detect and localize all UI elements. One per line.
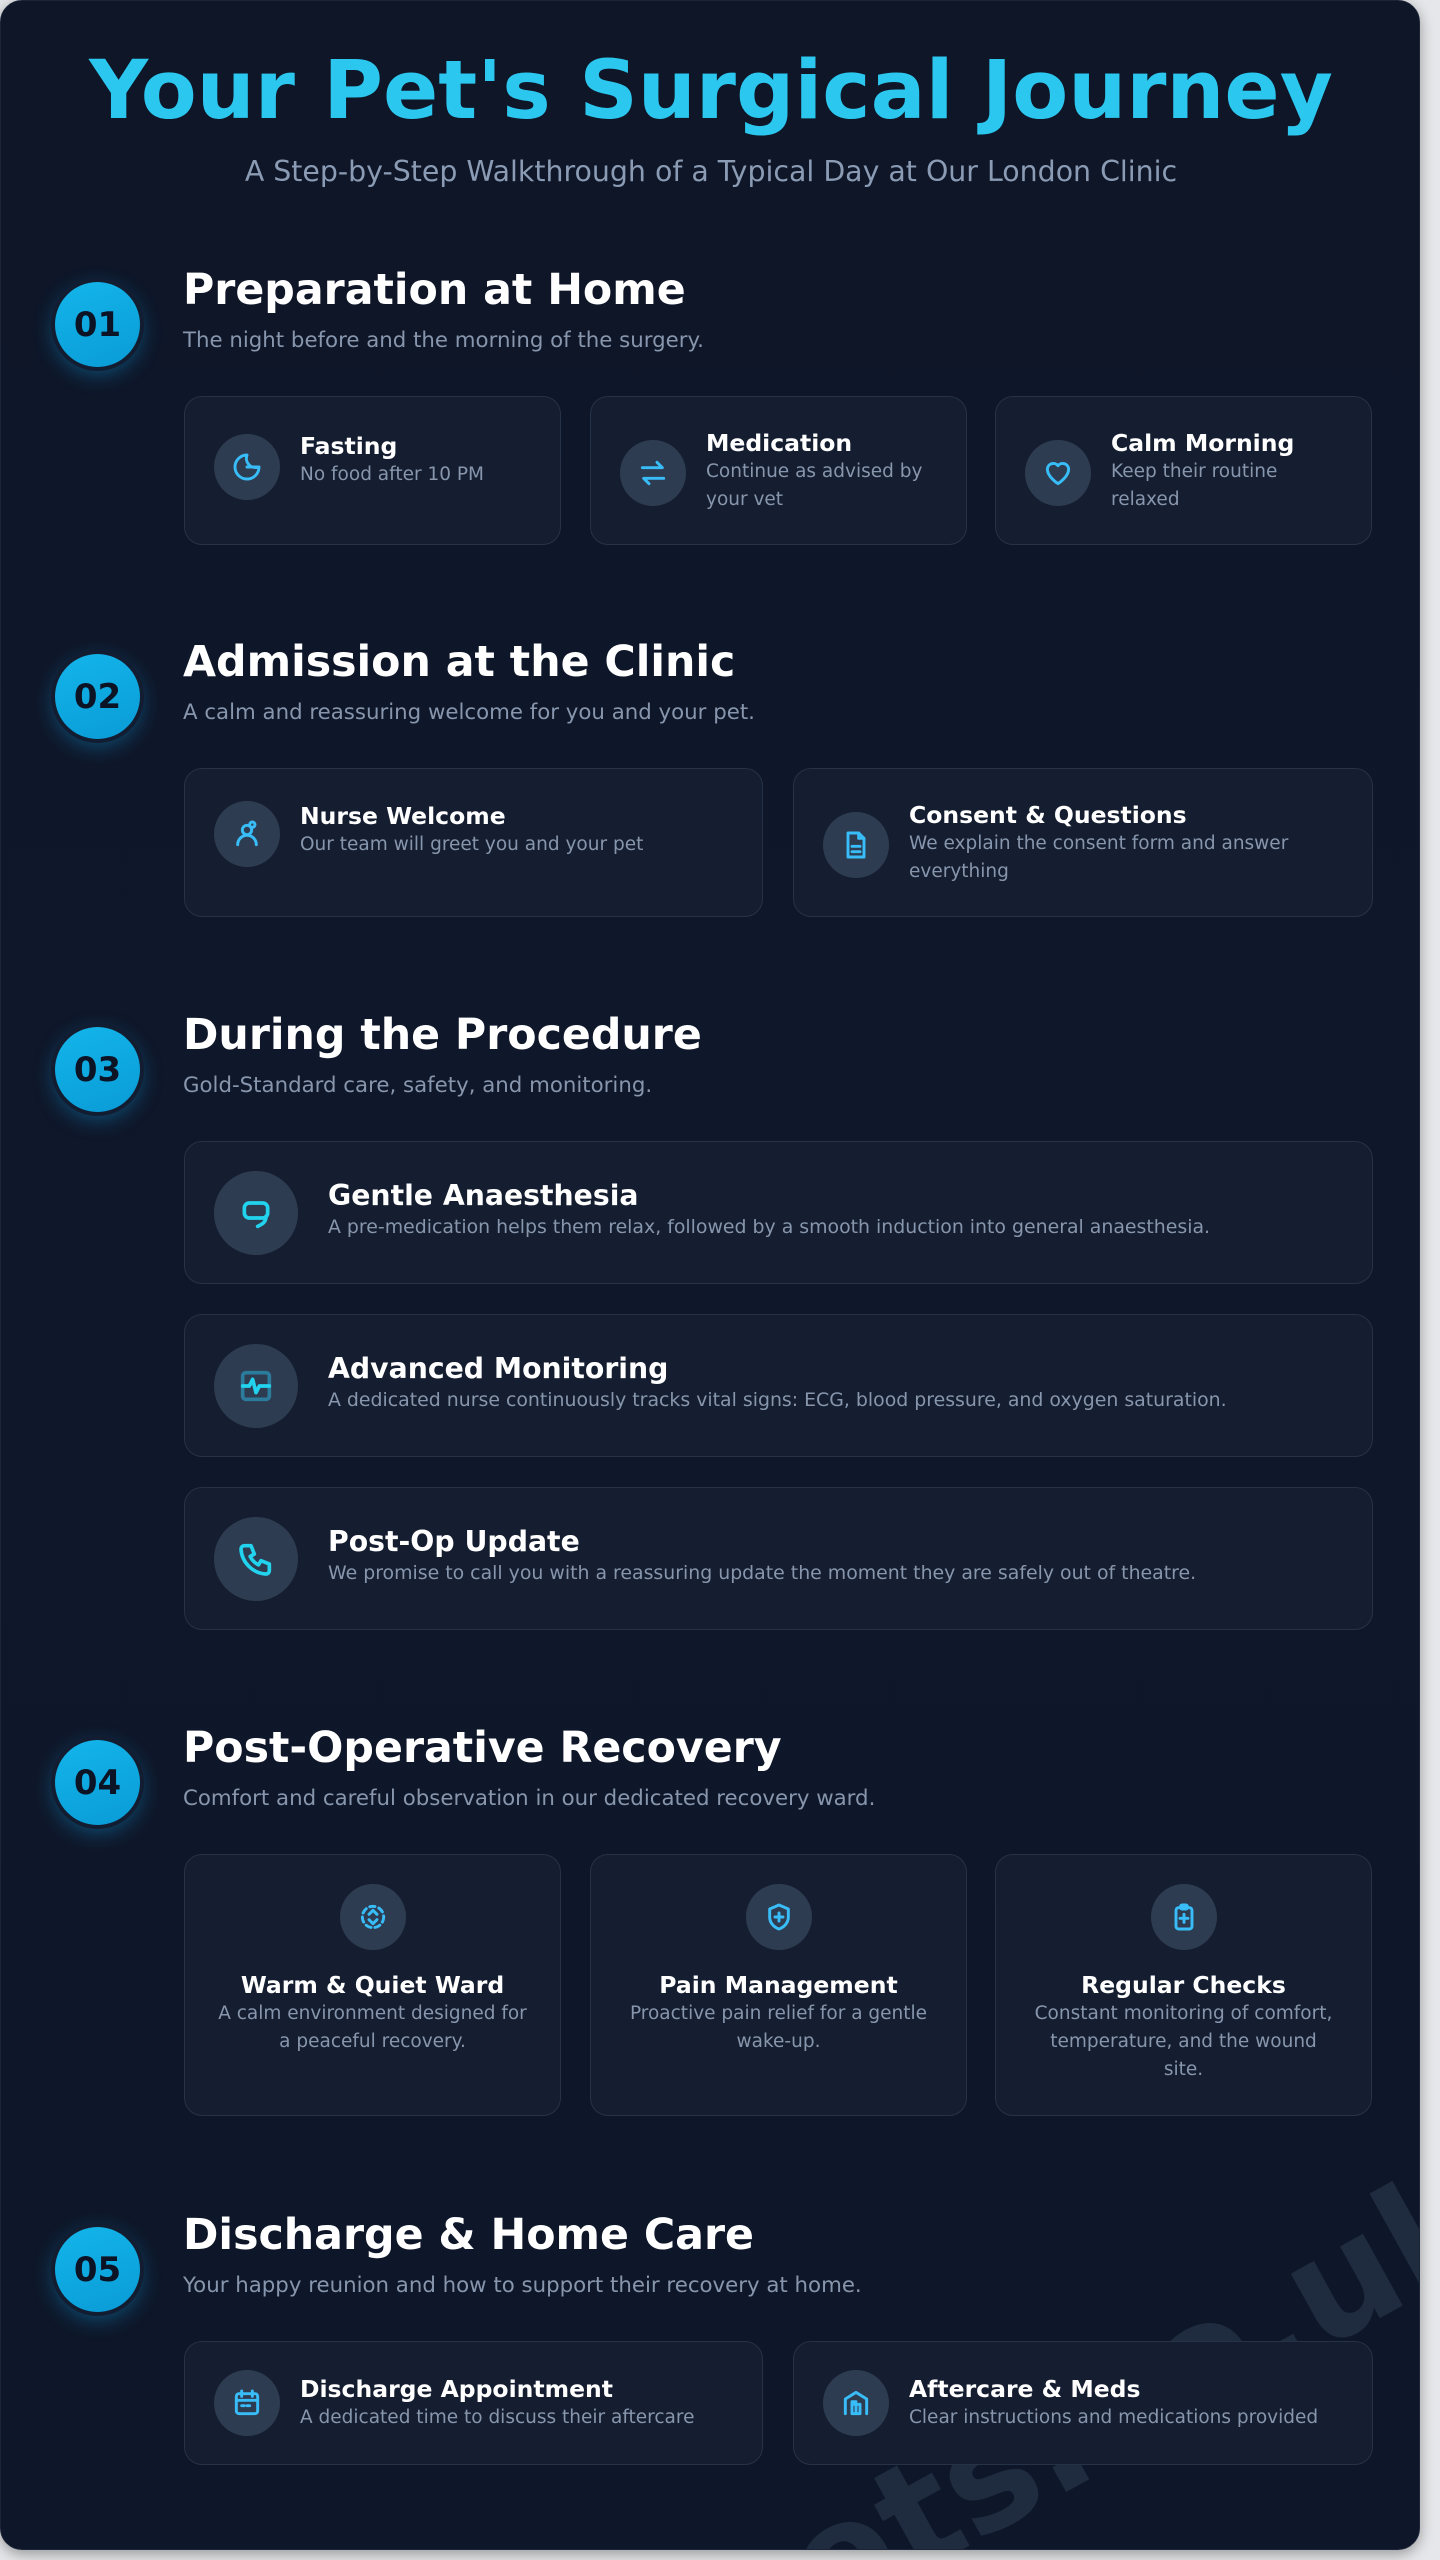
step number 02 (55, 654, 140, 739)
heading: Discharge & Home Care (183, 2210, 754, 2260)
card: aftercare: Clear instructions and medications provided (909, 2407, 1318, 2428)
card: consent: We explain the consent form and answer everything (909, 832, 1288, 882)
card: discharge appointment: A dedicated time to discuss their aftercare (300, 2407, 694, 2428)
card: aftercare (793, 2341, 1373, 2465)
section 2: admission (42, 637, 1373, 917)
icon: calendar (214, 2370, 280, 2436)
card: regular checks: Constant monitoring of comfort, temperature, and the wound site. (1035, 2003, 1332, 2080)
step number 05: 05 (74, 2250, 121, 2290)
card: medication (590, 396, 967, 545)
card: regular checks (995, 1854, 1372, 2116)
card: gentle anaesthesia: A pre-medication helps them relax, followed by a smooth induction into general anaesthesia. (328, 1216, 1210, 1238)
card: fasting: Fasting (300, 432, 397, 460)
card: aftercare: Aftercare & Meds (909, 2375, 1140, 2403)
section 1: preparation at home (42, 265, 1372, 545)
step number 02: 02 (74, 676, 121, 716)
card: calm morning: Calm Morning (1111, 428, 1294, 456)
card: medication: Continue as advised by your vet (706, 460, 922, 510)
card: fasting (184, 396, 561, 545)
card: pain management (590, 1854, 967, 2116)
icon: moon (214, 434, 280, 500)
card: warm ward: A calm environment designed for a peaceful recovery. (218, 2003, 527, 2052)
section 5: discharge (42, 2210, 1373, 2465)
title: Your Pet's Surgical Journey (89, 43, 1333, 138)
step number 03: 03 (74, 1050, 121, 1090)
card: gentle anaesthesia: Gentle Anaesthesia (328, 1178, 639, 1212)
card: nurse welcome: Our team will greet you and your pet (300, 834, 643, 854)
card: pain management: Pain Management (659, 1971, 898, 1999)
card: consent (793, 768, 1373, 917)
card: gentle anaesthesia (184, 1141, 1373, 1284)
card: discharge appointment: Discharge Appointment (300, 2375, 613, 2403)
heading: Preparation at Home (183, 265, 686, 315)
step number 03 (55, 1027, 140, 1112)
card: discharge appointment (184, 2341, 763, 2465)
card: warm ward: Warm & Quiet Ward (241, 1971, 504, 1999)
icon: monitor (214, 1344, 298, 1428)
step number 01 (55, 282, 140, 367)
card: warm ward (184, 1854, 561, 2116)
heading: Admission at the Clinic (183, 637, 735, 687)
card: advanced monitoring: A dedicated nurse continuously tracks vital signs: ECG, blood pressure, and oxygen saturation. (328, 1388, 1227, 1410)
step number 04 (55, 1740, 140, 1825)
section 3: procedure (42, 1010, 1373, 1630)
subheading: The night before and the morning of the surgery. (183, 328, 704, 353)
icon: shield (746, 1884, 812, 1950)
card: post-op update: Post-Op Update (328, 1524, 580, 1558)
section 4: recovery (42, 1723, 1372, 2116)
icon: phone (214, 1516, 298, 1600)
step number 04: 04 (74, 1762, 121, 1802)
step number 05 (55, 2227, 140, 2312)
card: advanced monitoring: Advanced Monitoring (328, 1352, 668, 1384)
card: pain management: Proactive pain relief for a gentle wake-up. (630, 2003, 927, 2052)
icon: nurse (214, 800, 280, 866)
subheading: Your happy reunion and how to support their recovery at home. (183, 2273, 862, 2298)
card: post-op update: We promise to call you with a reassuring update the moment they are safely out of theatre. (328, 1562, 1196, 1584)
icon: mask (214, 1170, 298, 1254)
subheading: Comfort and careful observation in our dedicated recovery ward. (183, 1786, 875, 1811)
subtitle: A Step-by-Step Walkthrough of a Typical Day at Our London Clinic (245, 155, 1177, 188)
card: calm morning: Keep their routine relaxed (1111, 460, 1277, 510)
card: consent: Consent & Questions (909, 800, 1187, 828)
card: calm morning (995, 396, 1372, 545)
card: nurse welcome: Nurse Welcome (300, 802, 506, 830)
icon: heart (1025, 440, 1091, 506)
icon: arrows (620, 440, 686, 506)
card: advanced monitoring (184, 1314, 1373, 1457)
card: post-op update (184, 1487, 1373, 1630)
icon: clipboard (1150, 1884, 1216, 1950)
heading: Post-Operative Recovery (183, 1723, 782, 1773)
card: regular checks: Regular Checks (1081, 1971, 1286, 1999)
step number 01: 01 (74, 304, 121, 344)
icon: document (823, 812, 889, 878)
subheading: Gold-Standard care, safety, and monitoring. (183, 1073, 652, 1098)
icon: home (823, 2370, 889, 2436)
icon: cycle (340, 1884, 406, 1950)
card: fasting: No food after 10 PM (300, 464, 484, 484)
heading: During the Procedure (183, 1010, 702, 1060)
subheading: A calm and reassuring welcome for you and your pet. (183, 700, 755, 725)
card: nurse welcome (184, 768, 763, 917)
card: medication: Medication (706, 428, 852, 456)
